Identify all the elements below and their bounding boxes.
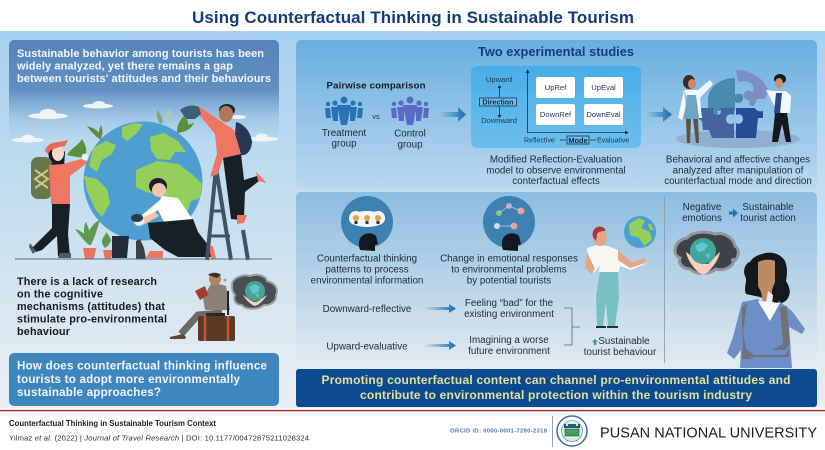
text: counterfactual thinking patterns: environmental information (311, 276, 423, 286)
text: negative emotions: Negative (683, 202, 722, 213)
pairwise comparison: Treatment (322, 128, 366, 139)
globe (84, 122, 202, 240)
bracket arrow (564, 308, 580, 345)
title: Using Counterfactual Thinking in Sustainable Tourism (192, 8, 634, 27)
illustration: cloud with globe in hands (675, 232, 738, 275)
kneeling man (131, 178, 216, 260)
icon: thinking head with bulbs (341, 196, 393, 251)
text: lack of research: on the cognitive (17, 288, 103, 300)
pairwise comparison: group (331, 138, 357, 150)
logo: university seal (557, 416, 587, 446)
text: sustainable tourist behaviour: tourist behaviour (584, 347, 657, 358)
scientist right (766, 74, 791, 142)
model diagram: Direction (482, 98, 514, 107)
text: negative emotions: tourist action (740, 213, 796, 224)
model diagram: Downward (481, 116, 517, 125)
model diagram (471, 66, 641, 148)
illustration: reader on suitcase with thought cloud (170, 273, 277, 341)
panel: intro text: widely analyzed, yet there remains a gap (16, 60, 233, 72)
illustration: puzzle head with scientists (676, 70, 800, 148)
model diagram: Evaluative (597, 138, 629, 144)
plants on globe (87, 108, 194, 141)
footer rule (0, 410, 825, 411)
icon: treatment group (325, 96, 363, 125)
text: change in emotional responses: by potential tourists (467, 276, 551, 286)
caption: changes: analyzed after manipulation of (673, 166, 804, 176)
scientist left (678, 75, 713, 143)
row: upward-evaluative: future environment (468, 346, 550, 357)
icon: thinking head with network (483, 196, 535, 251)
text: sustainable tourist behaviour: Sustainable (598, 336, 650, 347)
footer: citation: Counterfactual Thinking in Sustainable Tourism Context (9, 419, 216, 428)
arrow (440, 107, 466, 122)
model diagram: Reflective (524, 138, 555, 144)
panel: research question: How does counterfactual thinking influence (17, 360, 268, 372)
illustration: tourist holding globe (585, 216, 656, 328)
ground line (15, 258, 272, 260)
panel: intro text: Sustainable behavior among tourists has been (17, 48, 264, 60)
panel: counterfactual effects (296, 192, 817, 370)
row: upward-evaluative: Imagining a worse (469, 335, 549, 346)
row: downward-reflective (323, 298, 554, 320)
arrow (647, 107, 672, 122)
footer: orcid: ORCID ID: 0000-0001-7280-2318 (450, 428, 548, 434)
footer: university name: PUSAN NATIONAL UNIVERSITY (600, 426, 817, 442)
row: upward-evaluative (326, 335, 550, 357)
panel: conclusion banner: contribute to environmental protection within the tourism industry (360, 388, 752, 402)
footer: citation: Yilmaz et al. (2022) | Journal of Travel Research | DOI: 10.1177/00472875211028324 (9, 434, 309, 442)
text: lack of research (17, 276, 167, 338)
model diagram: DownEval (586, 110, 621, 119)
panel: two experimental studies (296, 40, 817, 188)
text: counterfactual thinking patterns (311, 254, 423, 286)
caption: changes: counterfactual mode and direction (664, 176, 812, 187)
caption: model: conterfactual effects (512, 176, 600, 187)
left hiker (29, 139, 88, 258)
text: sustainable tourist behaviour (584, 336, 657, 358)
caption: model (486, 154, 626, 187)
pairwise comparison: vs (372, 112, 380, 121)
row: upward-evaluative: Upward-evaluative (326, 342, 408, 352)
model diagram: UpRef (545, 83, 567, 92)
ladder woman (180, 104, 266, 260)
divider (663, 197, 666, 363)
footer: citation (9, 419, 309, 442)
text: lack of research: behaviour (17, 326, 71, 338)
row: downward-reflective: Downward-reflective (323, 304, 412, 315)
illustration: thinking woman (727, 253, 805, 368)
text: counterfactual thinking patterns: patterns to process (325, 264, 409, 276)
panel: research question: sustainable approaches? (17, 386, 161, 399)
panel: conclusion banner: Promoting counterfactual content can channel pro-environmental attitudes and (322, 373, 790, 387)
text: lack of research: mechanisms (attitudes) that (17, 301, 165, 313)
caption: model: Modified Reflection-Evaluation (490, 154, 622, 166)
panel: research question: tourists to adopt more environmentally (17, 373, 241, 386)
caption: changes (664, 154, 812, 187)
pairwise comparison: Control (394, 128, 426, 140)
icon: control group (391, 96, 429, 125)
model diagram: DownRef (540, 110, 572, 119)
panel: intro text: between tourists' attitudes and their behaviours (17, 73, 271, 85)
row: downward-reflective: Feeling “bad” for the (465, 298, 554, 309)
caption: model: model to observe environmental (486, 166, 626, 176)
row: downward-reflective: existing environment (464, 309, 554, 320)
pairwise comparison: group (397, 140, 423, 150)
text: negative emotions (682, 202, 796, 224)
pairwise comparison: Pairwise comparison (326, 80, 426, 92)
thought cloud (224, 275, 277, 309)
panel: research question (9, 353, 279, 406)
text: negative emotions: Sustainable (742, 202, 794, 213)
panel: intro text (9, 40, 279, 140)
panel: conclusion banner (296, 369, 817, 407)
text: lack of research: stimulate pro-environmental (17, 314, 167, 326)
potted plants (75, 220, 146, 259)
text: change in emotional responses (440, 254, 578, 286)
model diagram: UpEval (591, 83, 616, 92)
footer divider (551, 416, 554, 447)
heading: Two experimental studies (478, 44, 634, 59)
text: counterfactual thinking patterns: Counterfactual thinking (317, 254, 417, 264)
text: lack of research: There is a lack of research (17, 276, 157, 288)
illustration: people caring for the globe (12, 101, 278, 260)
text: negative emotions: emotions (682, 213, 722, 224)
text: change in emotional responses: to environmental problems (451, 264, 567, 276)
caption: changes: Behavioral and affective changes (666, 154, 810, 166)
model diagram: Mode (568, 136, 588, 145)
text: change in emotional responses: Change in emotional responses (440, 254, 578, 264)
pairwise comparison (322, 80, 429, 150)
model diagram: Upward (486, 75, 512, 84)
